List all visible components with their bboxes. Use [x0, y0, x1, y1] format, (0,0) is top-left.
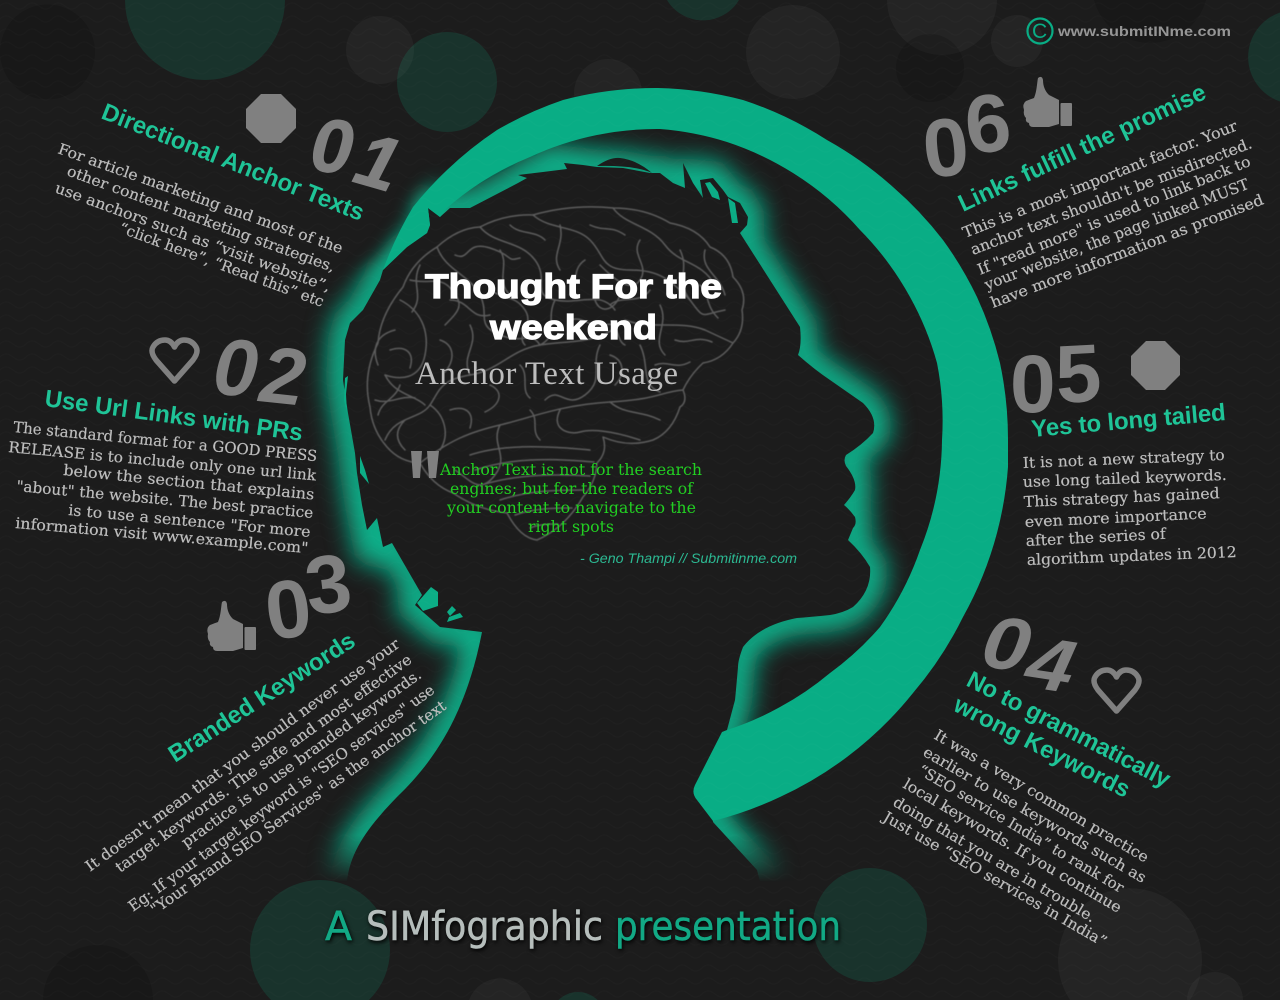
body 02: The standard format for a GOOD PRESS	[13, 418, 318, 465]
icon: thumbs up	[207, 601, 256, 651]
body 01: For article marketing and most of the	[56, 140, 346, 257]
body 02: RELEASE is to include only one url link	[8, 438, 318, 485]
head glow	[343, 163, 874, 882]
body 02: below the section that explains	[63, 461, 315, 504]
body 06: your website, the page linked MUST	[981, 175, 1251, 294]
number 01: 01	[308, 102, 410, 208]
panel: 02 use url links with PRs	[8, 322, 318, 557]
head silhouette	[343, 158, 874, 882]
body 04: doing that you are in trouble.	[890, 793, 1099, 926]
icon: heart	[152, 340, 197, 381]
body 05: It is not a new strategy to	[1022, 446, 1225, 472]
body 05: This strategy has gained	[1023, 484, 1220, 511]
footer tagline: presentation	[615, 904, 841, 950]
number 06: 06	[918, 77, 1015, 196]
heading 04: No to grammatically	[962, 666, 1175, 793]
body 01: other content marketing strategies,	[65, 162, 338, 276]
body 02: is to use a sentence "For more	[68, 501, 311, 541]
heading 01: Directional Anchor Texts	[98, 98, 368, 227]
quote mark second stroke	[427, 451, 439, 478]
central title	[425, 268, 722, 347]
body 04	[878, 726, 1152, 951]
copyright logo: C	[1032, 20, 1047, 43]
body 01: “click here”, “Read this” etc	[117, 219, 326, 311]
body 06: This is a most important factor. Your	[960, 116, 1241, 242]
body 02: "about" the website. The best practice	[16, 477, 314, 522]
green band around the head	[383, 88, 1008, 821]
body 03: target keywords. The safe and most effective	[112, 650, 415, 876]
heading 03: Branded Keywords	[164, 627, 360, 768]
quote text: engines; but for the readers of	[450, 479, 694, 498]
quote text: your content to navigate to the	[446, 498, 696, 517]
body 05	[1022, 446, 1237, 569]
quote attribution: - Geno Thampi // Submitinme.com	[580, 551, 797, 566]
body 05: use long tailed keywords.	[1023, 466, 1227, 491]
body 02: information visit www.example.com"	[15, 514, 309, 557]
central title: weekend	[489, 309, 657, 347]
body 06: have more information as promised	[988, 190, 1266, 312]
body 04: local keywords. If you continue	[900, 775, 1125, 917]
heading 04: wrong Keywords	[948, 691, 1134, 803]
quote text: Anchor Text is not for the search	[439, 460, 702, 479]
body 06	[960, 116, 1266, 312]
body 03	[82, 634, 449, 918]
body 06: anchor text shouldn't be misdirected.	[968, 134, 1255, 259]
body 03: Eg: If your target keyword is "SEO services" use	[125, 681, 438, 915]
heading 02: Use Url Links with PRs	[43, 385, 304, 447]
panel: 01 directional anchor texts	[53, 94, 410, 311]
body 03: It doesn't mean that you should never use your	[82, 634, 404, 875]
copyright logo	[1028, 18, 1231, 44]
body 03: "Your Brand SEO Services" as the anchor text	[147, 697, 449, 918]
quote mark	[411, 451, 422, 478]
number 05: 05	[1010, 328, 1103, 430]
panel: 03 branded keywords	[82, 537, 449, 918]
body 04: “SEO service India” to rank for	[915, 761, 1128, 897]
body 04: It was a very common practice	[931, 726, 1152, 866]
icon: octagon	[1131, 341, 1180, 390]
icon: heart	[1094, 670, 1139, 711]
panel: 04 no to grammatically wrong keywords	[878, 600, 1175, 951]
quote text: right spots	[528, 517, 614, 536]
number 02: 02	[211, 322, 310, 423]
footer tagline: SIMfographic	[366, 904, 603, 950]
body 02	[8, 418, 318, 557]
heading 06: Links fulfill the promise	[954, 79, 1210, 217]
body 03: practice is to use branded keywords.	[178, 665, 425, 851]
panel: 06 links fulfill the promise	[918, 77, 1266, 312]
body 01: use anchors such as “visit website”,	[53, 179, 333, 296]
subtitle: Anchor Text Usage	[415, 356, 678, 392]
copyright logo: www.submitINme.com	[1057, 23, 1231, 39]
footer tagline: A	[325, 904, 353, 950]
body 06: If "read more" is used to link back to	[975, 152, 1253, 279]
body 04: earlier to use keywords such as	[920, 743, 1149, 887]
number 04: 04	[976, 600, 1083, 709]
panel: 05 yes to long tailed	[1010, 328, 1237, 569]
central title: Thought For the	[425, 268, 722, 306]
body 01	[53, 140, 346, 311]
heading 05: Yes to long tailed	[1030, 399, 1227, 443]
body 05: after the series of	[1025, 525, 1168, 550]
icon: thumbs up	[1023, 77, 1072, 127]
quote text	[439, 460, 702, 536]
body 05: algorithm updates in 2012	[1026, 543, 1237, 569]
body 04: Just use “SEO services in India”	[878, 807, 1110, 951]
icon: octagon	[246, 94, 296, 143]
footer tagline	[325, 904, 841, 950]
brain illustration	[367, 207, 744, 540]
number 03: 03	[260, 537, 356, 658]
body 05: even more importance	[1024, 504, 1207, 531]
